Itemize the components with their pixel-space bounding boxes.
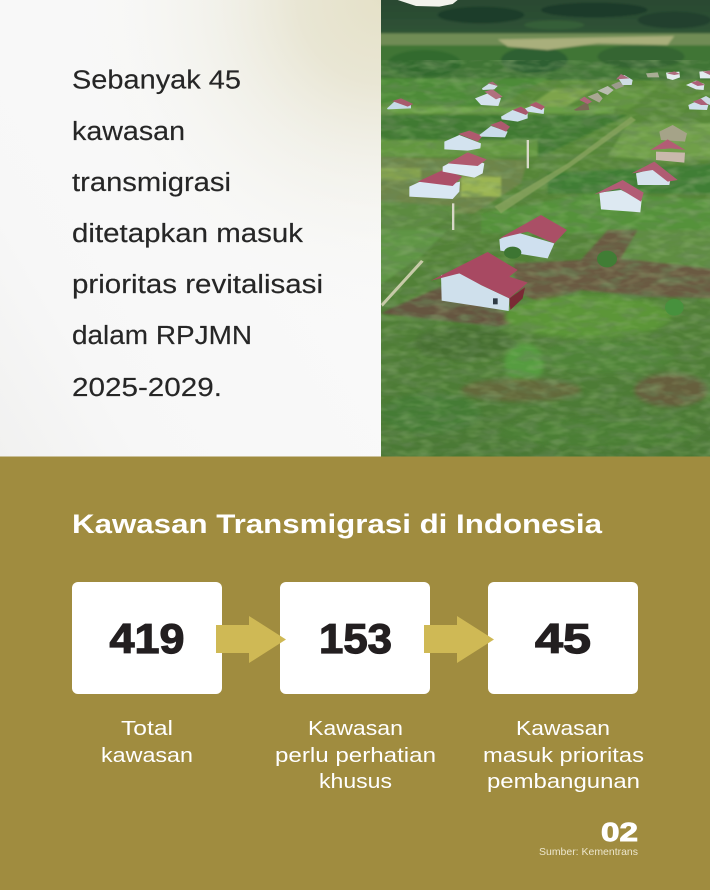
house 2 (443, 152, 487, 178)
caption: total: kawasan (101, 744, 193, 767)
intro text block: ditetapkan masuk (72, 220, 303, 248)
foreground house (431, 252, 528, 311)
source: Sumber: Kementrans (539, 846, 638, 858)
row of distant huts (574, 72, 659, 111)
arrow: 419 to 153 (216, 616, 286, 663)
photo: aerial view of transmigration settlement houses (368, 0, 710, 457)
card: 419 (72, 582, 222, 694)
grass and foliage texture (381, 60, 710, 457)
caption: development priority: Kawasan (516, 717, 610, 740)
poles (527, 140, 529, 168)
house right 2 (632, 162, 678, 185)
caption: special attention: khusus (319, 770, 392, 793)
terrain upper, drawn in zoom-space coordinates (368, 0, 710, 233)
houses lower, in zoom-space coordinates (381, 215, 684, 316)
card: 153: 153 (319, 615, 392, 662)
intro text block: 2025-2029. (72, 374, 222, 402)
caption: special attention: Kawasan (308, 717, 403, 740)
terrain lower, drawn in zoom-space coordinates (381, 229, 710, 408)
card: 45 (488, 582, 638, 694)
intro text block: kawasan (72, 118, 185, 146)
arrow: 153 to 45 (424, 616, 494, 663)
panel: intro background (0, 0, 381, 457)
shrubs and fence (597, 251, 617, 267)
house 1 (409, 169, 462, 199)
intro text block (72, 66, 323, 402)
thatched hut (659, 125, 687, 142)
caption: development priority (483, 717, 644, 793)
light foliage highlights (381, 60, 710, 457)
caption: special attention: perlu perhatian (275, 744, 436, 767)
caption: development priority: pembangunan (487, 770, 640, 793)
caption: special attention (275, 717, 436, 793)
houses upper, in zoom-space coordinates (387, 71, 710, 230)
house 5 (501, 107, 529, 122)
panel: statistics background (0, 456, 710, 890)
caption: development priority: masuk prioritas (483, 744, 644, 767)
heading: Kawasan Transmigrasi di Indonesia (72, 509, 603, 539)
forest and sky (398, 0, 636, 213)
card: 45: 45 (535, 615, 591, 662)
caption: total: Total (121, 717, 173, 740)
intro text block: dalam RPJMN (72, 322, 252, 350)
house 8 (482, 82, 498, 90)
house 6 (525, 102, 545, 114)
house right 1 (594, 180, 644, 212)
intro text block: transmigrasi (72, 169, 231, 197)
mid house (499, 215, 567, 258)
intro text block: Sebanyak 45 (72, 66, 241, 94)
tan house (650, 139, 685, 163)
card: 419: 419 (110, 615, 184, 662)
house 3 (444, 131, 483, 151)
house 4 (479, 121, 510, 137)
intro text block: prioritas revitalisasi (72, 271, 323, 299)
house 9 (387, 98, 413, 109)
caption: total (101, 717, 193, 767)
page number: 02 (601, 817, 638, 847)
houses far right (666, 71, 710, 110)
house 7 (475, 89, 503, 106)
card: 153 (280, 582, 430, 694)
